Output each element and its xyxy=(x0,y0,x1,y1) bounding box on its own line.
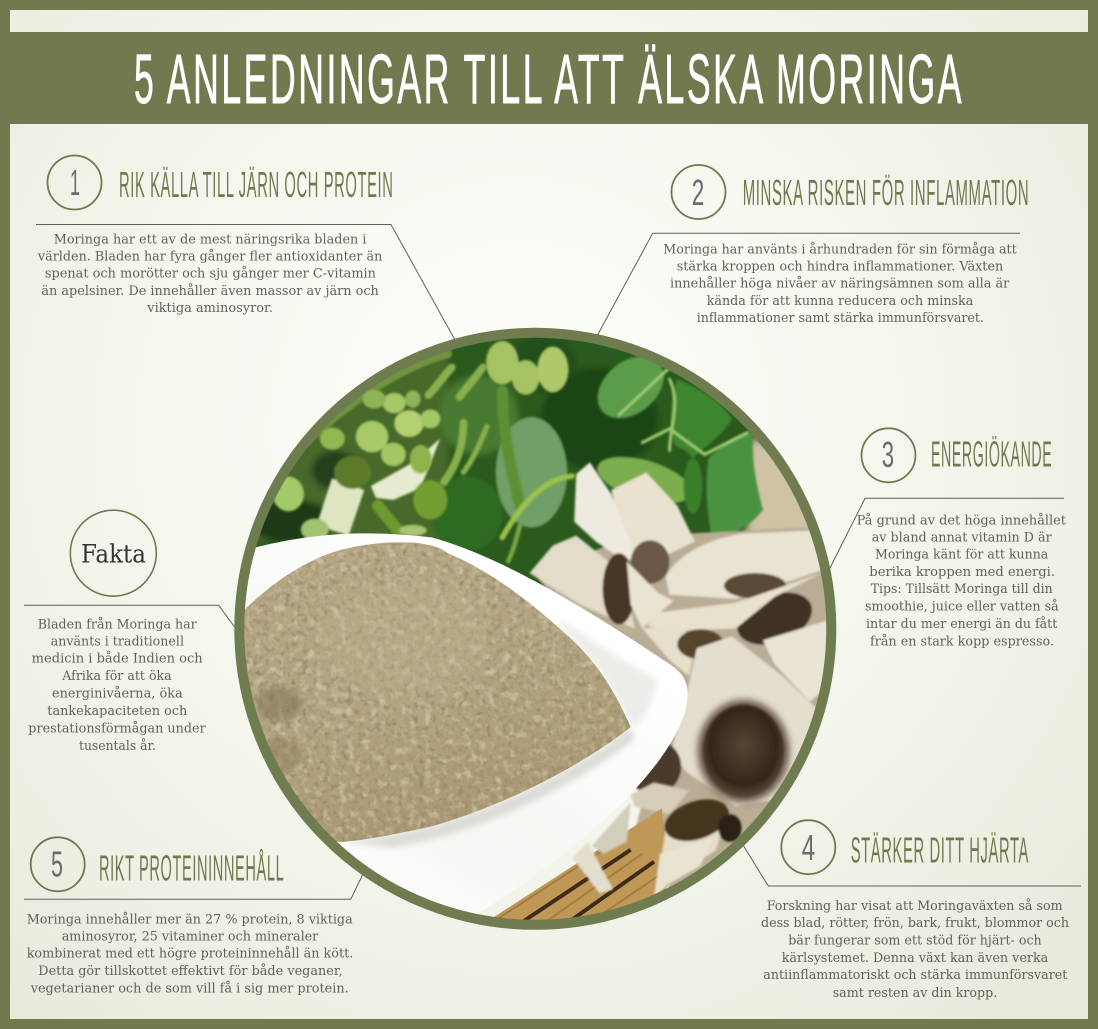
stems xyxy=(277,354,747,561)
seed shells xyxy=(530,462,837,889)
leaves xyxy=(432,344,763,551)
white bowl xyxy=(245,533,688,914)
body text 1: än apelsiner. De innehåller även massor av järn och xyxy=(41,283,379,299)
number circle 3 xyxy=(862,428,916,482)
body text 1: Moringa har ett av de mest näringsrika bladen i xyxy=(54,232,366,247)
body text 3 xyxy=(857,512,1067,649)
section 1: 1 xyxy=(70,162,80,203)
body text 5: aminosyror, 25 vitaminer och mineraler xyxy=(62,929,319,944)
body text 4: Forskning har visat att Moringaväxten så som xyxy=(767,898,1063,914)
body text 3: intar du mer energi än du fått xyxy=(866,616,1058,632)
flower buds xyxy=(273,341,568,541)
white stalks xyxy=(316,439,440,535)
body text 4: samt resten av din kropp. xyxy=(833,986,997,1001)
fakta text: Bladen från Moringa har xyxy=(38,616,197,632)
fakta text: medicin i både Indien och xyxy=(32,650,203,666)
body text 2: stärka kroppen och hindra inflammationer. Växten xyxy=(677,259,1004,274)
number 5: 5 xyxy=(51,844,63,884)
body text 2: inflammationer samt stärka immunförsvaret. xyxy=(697,311,984,326)
section 4 xyxy=(761,820,1070,1001)
fakta circle xyxy=(70,510,156,596)
body text 2 xyxy=(663,241,1017,326)
bowl outer shading xyxy=(343,727,635,848)
number circle 1 xyxy=(48,156,102,210)
body text 2: innehåller höga nivåer av näringsämnen som alla är xyxy=(670,275,1010,291)
fakta text: använts i traditionell xyxy=(51,634,184,649)
fakta text: Afrika för att öka xyxy=(61,669,172,684)
lower seed xyxy=(572,792,742,897)
photo background foliage xyxy=(256,338,808,588)
section 2 xyxy=(663,165,1029,326)
number circle 2 xyxy=(672,165,726,219)
infographic: RIK KÄLLA TILL JÄRN OCH PROTEIN xyxy=(119,164,394,205)
number 2: 2 xyxy=(692,172,704,213)
fakta text: tankekapaciteten och xyxy=(47,704,188,719)
section 5: RIKT PROTEININNEHÅLL xyxy=(99,848,284,889)
body text 5: Moringa innehåller mer än 27 % protein, 8 viktiga xyxy=(27,911,353,927)
body text 3: smoothie, juice eller vatten så xyxy=(865,599,1059,615)
number 3: 3 xyxy=(882,434,894,475)
fakta text xyxy=(28,616,206,754)
bamboo mat xyxy=(494,808,668,920)
fakta text: energinivåerna, öka xyxy=(52,685,183,701)
moringa powder xyxy=(244,542,630,842)
body text 3: Moringa känt för att kunna xyxy=(875,547,1049,562)
section 3 xyxy=(857,428,1067,649)
body text 2: Moringa har använts i århundraden för sin förmåga att xyxy=(663,241,1017,257)
body text 4: antiinflammatoriskt och stärka immunförsvaret xyxy=(763,968,1068,983)
number circle 5 xyxy=(31,837,85,891)
body text 5: kombinerat med ett högre proteininnehåll än kött. xyxy=(27,945,353,961)
photo ring xyxy=(239,333,831,925)
body text 3: av bland annat vitamin D är xyxy=(872,531,1052,546)
body text 1: viktiga aminosyror. xyxy=(146,301,273,316)
fakta label: Fakta xyxy=(81,540,146,569)
body text 5: vegetarianer och de som vill få i sig mer protein. xyxy=(30,980,349,996)
fakta text: tusentals år. xyxy=(79,738,156,754)
section: fakta xyxy=(28,510,206,754)
number 4: 4 xyxy=(802,827,815,868)
connector lines xyxy=(24,224,1081,899)
number circle 4 xyxy=(781,820,835,874)
section 1 xyxy=(37,156,394,316)
body text 1: spenat och morötter och sju gånger mer C-vitamin xyxy=(45,266,377,282)
central photo: moringa powder, leaves and seeds xyxy=(244,338,826,920)
body text 4: bär fungerar som ett stöd för hjärt- och xyxy=(788,933,1042,948)
body text 3: berika kroppen med energi. xyxy=(869,565,1055,580)
body text 3: På grund av det höga innehållet xyxy=(857,512,1067,528)
body text 4: dess blad, rötter, frön, bark, frukt, blommor och xyxy=(761,916,1070,931)
section 5 xyxy=(27,837,353,996)
fakta text: prestationsförmågan under xyxy=(28,720,206,736)
body text 2: kända för att kunna reducera och minska xyxy=(707,294,974,309)
body text 5 xyxy=(27,911,353,996)
body text 1: världen. Bladen har fyra gånger fler antioxidanter än xyxy=(37,248,383,264)
body text 4: kärlsystemet. Denna växt kan även verka xyxy=(782,951,1049,966)
title band xyxy=(0,32,1098,124)
body text 5: Detta gör tillskottet effektivt för både veganer, xyxy=(38,963,343,979)
body text 4 xyxy=(761,898,1070,1001)
bowl inner shadow xyxy=(561,622,658,726)
body text 3: Tips: Tillsätt Moringa till din xyxy=(871,582,1053,597)
body text 3: från en stark kopp espresso. xyxy=(870,633,1054,649)
body text 1 xyxy=(37,232,383,316)
